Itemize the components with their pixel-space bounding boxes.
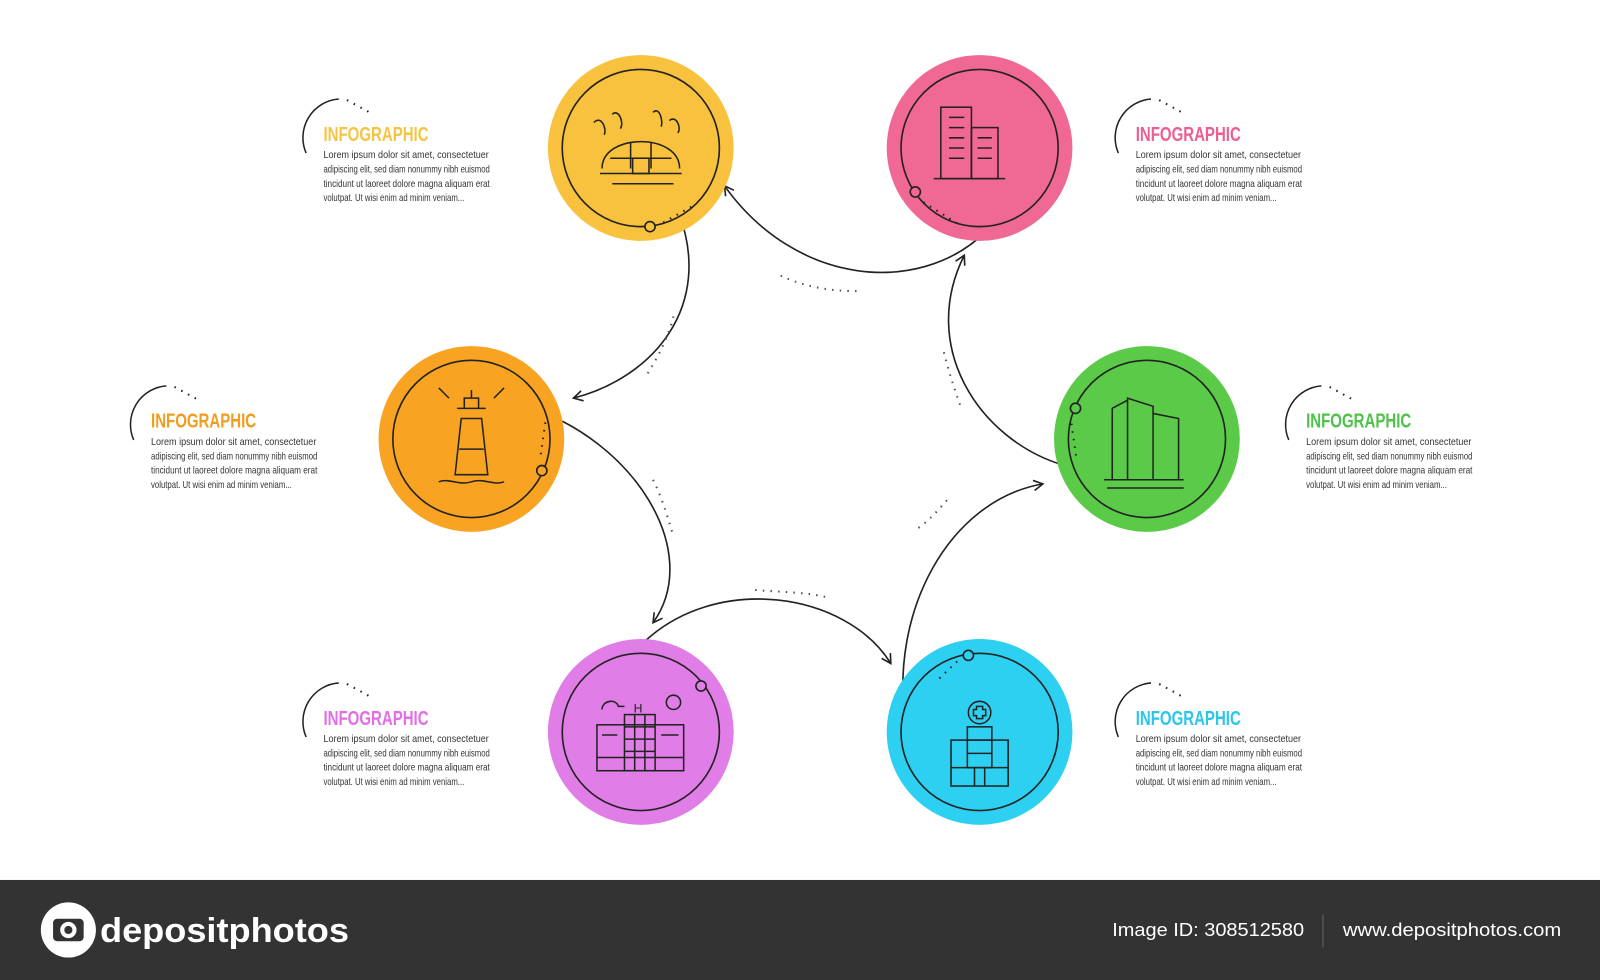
node: orange lighthouse [379, 346, 564, 532]
text block: mid-right green: volutpat. Ut wisi enim ad minim veniam... [1306, 480, 1447, 491]
node: cyan hospital [887, 639, 1072, 825]
arrow: magenta to cyan [641, 599, 891, 664]
icon: hotel: H [634, 702, 643, 716]
text block: top-right pink: INFOGRAPHIC [1136, 124, 1241, 146]
node: magenta hotel [548, 639, 734, 825]
text block: bottom-right cyan: Lorem ipsum dolor sit amet, consectetuer [1136, 734, 1302, 745]
text block: top-left yellow: Lorem ipsum dolor sit amet, consectetuer [323, 150, 489, 161]
logo [41, 902, 349, 958]
text block: top-left yellow: INFOGRAPHIC [323, 124, 429, 146]
text block: mid-left orange: tincidunt ut laoreet dolore magna aliquam erat [151, 466, 318, 477]
text block: bottom-right cyan: volutpat. Ut wisi enim ad minim veniam... [1136, 777, 1277, 788]
node: yellow stadium [548, 55, 734, 241]
footer bar [0, 880, 1600, 980]
arrow: green to pink [949, 255, 1061, 464]
node: pink buildings [887, 55, 1072, 241]
text block: mid-right green [1286, 386, 1473, 491]
text block: bottom-left magenta: adipiscing elit, sed diam nonummy nibh euismod [323, 748, 490, 759]
icon: hotel [597, 695, 684, 771]
arrow: cyan to green [903, 484, 1043, 727]
text block: bottom-left magenta: INFOGRAPHIC [323, 708, 429, 730]
text block: mid-left orange [130, 386, 318, 491]
arrow: pink to yellow [724, 186, 985, 272]
arrow: orange to magenta [526, 406, 670, 623]
text block: mid-left orange: adipiscing elit, sed diam nonummy nibh euismod [151, 451, 317, 462]
logo: depositphotos [100, 912, 349, 950]
text block: bottom-left magenta: volutpat. Ut wisi enim ad minim veniam... [323, 777, 464, 788]
arrow: yellow to orange [573, 212, 689, 398]
icon: stadium [594, 111, 682, 184]
text block: top-right pink [1115, 99, 1302, 204]
text block: mid-right green: Lorem ipsum dolor sit amet, consectetuer [1306, 437, 1472, 448]
text block: top-right pink: Lorem ipsum dolor sit amet, consectetuer [1136, 150, 1302, 161]
text block: mid-left orange: INFOGRAPHIC [151, 411, 256, 433]
text block: bottom-left magenta: Lorem ipsum dolor sit amet, consectetuer [323, 734, 489, 745]
text block: top-right pink: tincidunt ut laoreet dolore magna aliquam erat [1136, 179, 1302, 190]
text block: top-right pink: volutpat. Ut wisi enim ad minim veniam... [1136, 193, 1277, 204]
icon: office buildings [934, 107, 1005, 179]
text block: bottom-right cyan: adipiscing elit, sed diam nonummy nibh euismod [1136, 748, 1302, 759]
text block: bottom-right cyan [1115, 683, 1302, 788]
text block: top-left yellow: volutpat. Ut wisi enim ad minim veniam... [323, 193, 464, 204]
node: green skyscrapers [1054, 346, 1240, 532]
text block: mid-right green: adipiscing elit, sed diam nonummy nibh euismod [1306, 451, 1472, 462]
text block: mid-left orange: Lorem ipsum dolor sit amet, consectetuer [151, 437, 317, 448]
text block: bottom-left magenta [303, 683, 490, 788]
text block: bottom-right cyan: tincidunt ut laoreet dolore magna aliquam erat [1136, 763, 1302, 774]
image id: Image ID: 308512580 [1112, 919, 1304, 940]
text block: top-left yellow: adipiscing elit, sed diam nonummy nibh euismod [323, 165, 490, 176]
text block: bottom-right cyan: INFOGRAPHIC [1136, 708, 1241, 730]
icon: skyscrapers [1104, 398, 1184, 488]
text block: top-left yellow [303, 99, 490, 204]
website: www.depositphotos.com [1342, 919, 1561, 940]
text block: mid-right green: tincidunt ut laoreet dolore magna aliquam erat [1306, 466, 1473, 477]
text block: mid-right green: INFOGRAPHIC [1306, 411, 1411, 433]
text block: top-left yellow: tincidunt ut laoreet dolore magna aliquam erat [323, 179, 490, 190]
text block: mid-left orange: volutpat. Ut wisi enim ad minim veniam... [151, 480, 292, 491]
icon: lighthouse [439, 388, 504, 483]
text block: bottom-left magenta: tincidunt ut laoreet dolore magna aliquam erat [323, 763, 490, 774]
text block: top-right pink: adipiscing elit, sed diam nonummy nibh euismod [1136, 165, 1302, 176]
icon: hospital [951, 701, 1008, 786]
